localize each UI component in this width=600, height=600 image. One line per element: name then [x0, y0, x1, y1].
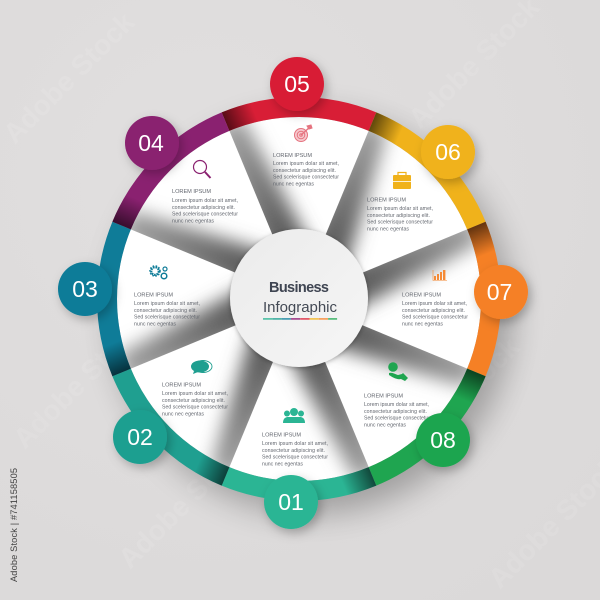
- text 03: LOREM IPSUM: [134, 292, 173, 298]
- badge 03: [58, 262, 112, 316]
- text 06: LOREM IPSUM: [367, 198, 406, 204]
- watermark: Adobe Stock: [382, 331, 526, 474]
- wedge 06: [326, 132, 467, 272]
- watermark: Adobe Stock: [0, 6, 141, 149]
- ring 04: [102, 102, 235, 235]
- hub colour rule: [263, 318, 337, 320]
- badge 03: 03: [72, 276, 98, 302]
- text 03: nunc nec egentas: [134, 322, 176, 328]
- text 07: Lorem ipsum dolar sit amet,: [402, 301, 467, 307]
- text 03: Lorem ipsum dolar sit amet,: [134, 301, 200, 307]
- center hub: [230, 229, 368, 367]
- text 04: [172, 189, 238, 224]
- text 04: Sed scelerisque consectetur: [172, 212, 238, 218]
- text 06: [367, 198, 433, 232]
- text 05: [273, 153, 339, 188]
- text 07: Sed scelerisque consectetur: [402, 314, 468, 320]
- icon: people: [283, 408, 305, 423]
- text 07: nunc nec egentas: [402, 322, 443, 328]
- icon: speech bubbles: [191, 360, 212, 374]
- text 08: [364, 394, 430, 428]
- badge 07: [474, 265, 528, 319]
- segment 05: [222, 56, 376, 234]
- segment 06: [326, 112, 486, 272]
- stock id caption: Adobe Stock | #741158505: [9, 468, 19, 582]
- text 04: nunc nec egentas: [172, 218, 214, 224]
- text 07: [402, 292, 468, 328]
- badge 07: 07: [487, 279, 512, 305]
- text 03: consectetur adipiscing elit.: [134, 308, 197, 314]
- text 05: Lorem ipsum dolar sit amet,: [273, 161, 339, 167]
- wedge 01: [230, 362, 368, 481]
- text 02: consectetur adipiscing elit.: [162, 398, 225, 404]
- watermark: Adobe Stock: [112, 431, 256, 574]
- badge 02: [113, 410, 167, 464]
- ring 06: [363, 102, 496, 235]
- icon: briefcase: [393, 172, 411, 189]
- segment 07: [362, 222, 536, 376]
- ring 01: [222, 467, 376, 501]
- watermark: Adobe Stock: [232, 161, 376, 304]
- ring 08: [363, 363, 496, 496]
- text 01: consectetur adipiscing elit.: [262, 448, 325, 454]
- ring 05: [222, 97, 376, 131]
- wheel drop shadow: [112, 114, 512, 514]
- badge 01: 01: [278, 489, 304, 515]
- badge 01: [264, 475, 318, 529]
- text 07: consectetur adipiscing elit.: [402, 308, 465, 314]
- wedge 04: [131, 131, 272, 272]
- segment 04: [112, 112, 272, 272]
- wedge 03: [117, 230, 236, 369]
- badge 06: 06: [435, 139, 461, 165]
- text 03: [134, 292, 200, 328]
- text 08: nunc nec egentas: [364, 422, 406, 428]
- segment 08: [325, 325, 486, 486]
- hub title: Business: [269, 280, 329, 296]
- text 06: Lorem ipsum dolar sit amet,: [367, 206, 433, 212]
- ring 02: [102, 363, 235, 496]
- icon: target: [294, 125, 312, 142]
- text 02: Sed scelerisque consectetur: [162, 404, 228, 410]
- text 05: nunc nec egentas: [273, 182, 314, 188]
- watermark: Adobe Stock: [7, 311, 151, 454]
- text 04: LOREM IPSUM: [172, 189, 211, 195]
- icon: hand with coin: [388, 362, 408, 381]
- text 04: Lorem ipsum dolar sit amet,: [172, 198, 238, 204]
- wedge 02: [131, 326, 273, 467]
- text 02: [162, 382, 228, 418]
- badge 05: 05: [284, 71, 310, 97]
- text 06: nunc nec egentas: [367, 226, 409, 232]
- text 02: Lorem ipsum dolar sit amet,: [162, 391, 228, 397]
- ring 07: [467, 222, 501, 376]
- text 08: Sed scelerisque consectetur: [364, 416, 430, 422]
- text 06: Sed scelerisque consectetur: [367, 220, 433, 226]
- text 01: Sed scelerisque consectetur: [262, 454, 328, 460]
- ring 03: [97, 222, 131, 376]
- wedge 08: [325, 325, 467, 467]
- badge 08: [416, 413, 470, 467]
- text 08: Lorem ipsum dolar sit amet,: [364, 402, 429, 408]
- text 08: consectetur adipiscing elit.: [364, 409, 427, 415]
- text 01: LOREM IPSUM: [262, 432, 301, 438]
- text 05: consectetur adipiscing elit.: [273, 168, 336, 174]
- icon: gears: [150, 266, 167, 279]
- text 01: nunc nec egentas: [262, 462, 303, 468]
- badge 02: 02: [127, 424, 153, 450]
- badge 05: [270, 57, 324, 111]
- text 06: consectetur adipiscing elit.: [367, 213, 430, 219]
- text 03: Sed scelerisque consectetur: [134, 314, 200, 320]
- text 02: LOREM IPSUM: [162, 382, 201, 388]
- badge 04: [125, 116, 179, 170]
- segment 01: [222, 362, 376, 538]
- badge 08: 08: [430, 427, 456, 453]
- badge 06: [421, 125, 475, 179]
- text 05: Sed scelerisque consectetur: [273, 174, 339, 180]
- icon: bar chart: [433, 270, 447, 280]
- text 04: consectetur adipiscing elit.: [172, 205, 235, 211]
- text 05: LOREM IPSUM: [273, 153, 312, 159]
- wedge 05: [230, 117, 368, 234]
- badge 04: 04: [138, 130, 164, 156]
- segment 03: [56, 222, 236, 376]
- hub disc: [230, 229, 368, 367]
- icon: magnifier: [194, 160, 210, 178]
- hub subtitle: Infographic: [263, 299, 338, 316]
- wedge 07: [362, 229, 480, 368]
- text 02: nunc nec egentas: [162, 412, 204, 418]
- text 07: LOREM IPSUM: [402, 292, 441, 298]
- text 01: Lorem ipsum dolar sit amet,: [262, 441, 328, 447]
- text 01: [262, 432, 328, 468]
- text 08: LOREM IPSUM: [364, 394, 403, 400]
- segment 02: [112, 326, 273, 486]
